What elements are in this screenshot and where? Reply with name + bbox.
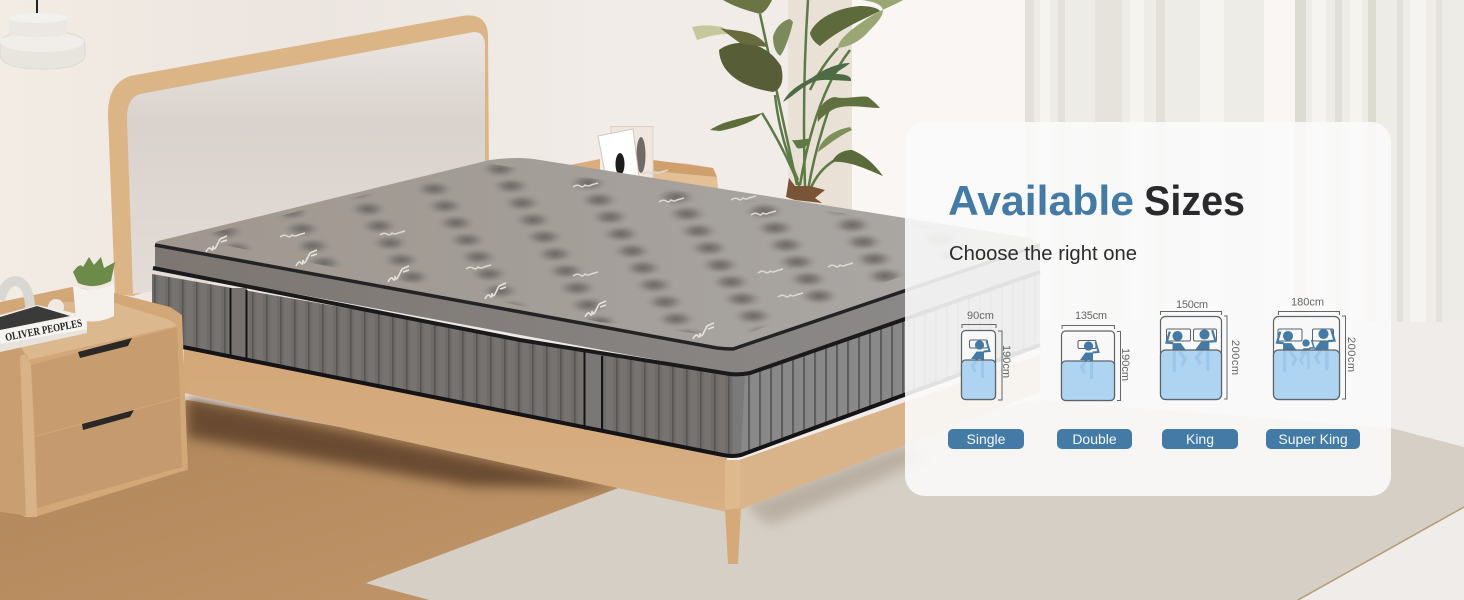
heading: Available Sizes: Sizes: [1144, 177, 1245, 224]
arch ornament: [0, 281, 30, 314]
size: King: [1160, 299, 1241, 400]
label: King: King: [1186, 431, 1214, 447]
pendant lamp: [0, 0, 85, 69]
heading: Available Sizes: Available: [948, 177, 1134, 224]
size: Super King: [1274, 296, 1357, 400]
mattress top surface: [155, 158, 1040, 349]
headboard: [108, 15, 489, 296]
size: King: 200cm: [1229, 340, 1241, 375]
mattress bottom and middle piping: [153, 268, 1040, 456]
shadow under bed: [187, 398, 620, 488]
rug: [366, 400, 1464, 600]
size: Double: 190cm: [1119, 348, 1131, 381]
label: Double: Double: [1072, 431, 1117, 447]
size: King: 150cm: [1176, 299, 1208, 311]
wood floor: [0, 400, 640, 600]
bed frame: [184, 345, 1040, 564]
label: King: [1162, 429, 1238, 449]
translucent panel: [905, 122, 1391, 496]
background: light floor: [852, 322, 1464, 600]
mattress pillow top side: [155, 245, 1040, 376]
book on nightstand: OLIVER PEOPLES: [4, 317, 83, 344]
label: Single: [948, 429, 1024, 449]
mattress top piping: [155, 245, 1040, 349]
size: Single: 190cm: [1000, 345, 1012, 378]
label: Super King: [1266, 429, 1360, 449]
mattress side quilting: [152, 272, 1040, 457]
size: Super King: 180cm: [1291, 296, 1324, 308]
decorative ball: [48, 299, 64, 315]
back nightstand with picture frames: [560, 126, 718, 190]
mattress tufts: [190, 164, 1000, 338]
subheading: Choose the right one: [949, 243, 1137, 265]
front nightstand: [0, 287, 188, 517]
plant: [692, 0, 903, 203]
size: Single: 90cm: [967, 310, 994, 322]
label: Single: Single: [967, 431, 1006, 447]
label: Double: [1057, 429, 1132, 449]
size: Double: [1062, 310, 1131, 400]
label: Super King: Super King: [1278, 431, 1348, 447]
size: Single: [962, 310, 1012, 400]
background: wall corner column: [788, 0, 852, 210]
potted succulent: [73, 257, 115, 322]
heading: Available Sizes: [948, 177, 1245, 224]
size: Double: 135cm: [1075, 310, 1107, 322]
size: Super King: 200cm: [1345, 337, 1357, 372]
mattress logo marks: [206, 170, 853, 339]
background: sheer curtains: [852, 0, 1464, 325]
book on nightstand: [0, 305, 87, 352]
